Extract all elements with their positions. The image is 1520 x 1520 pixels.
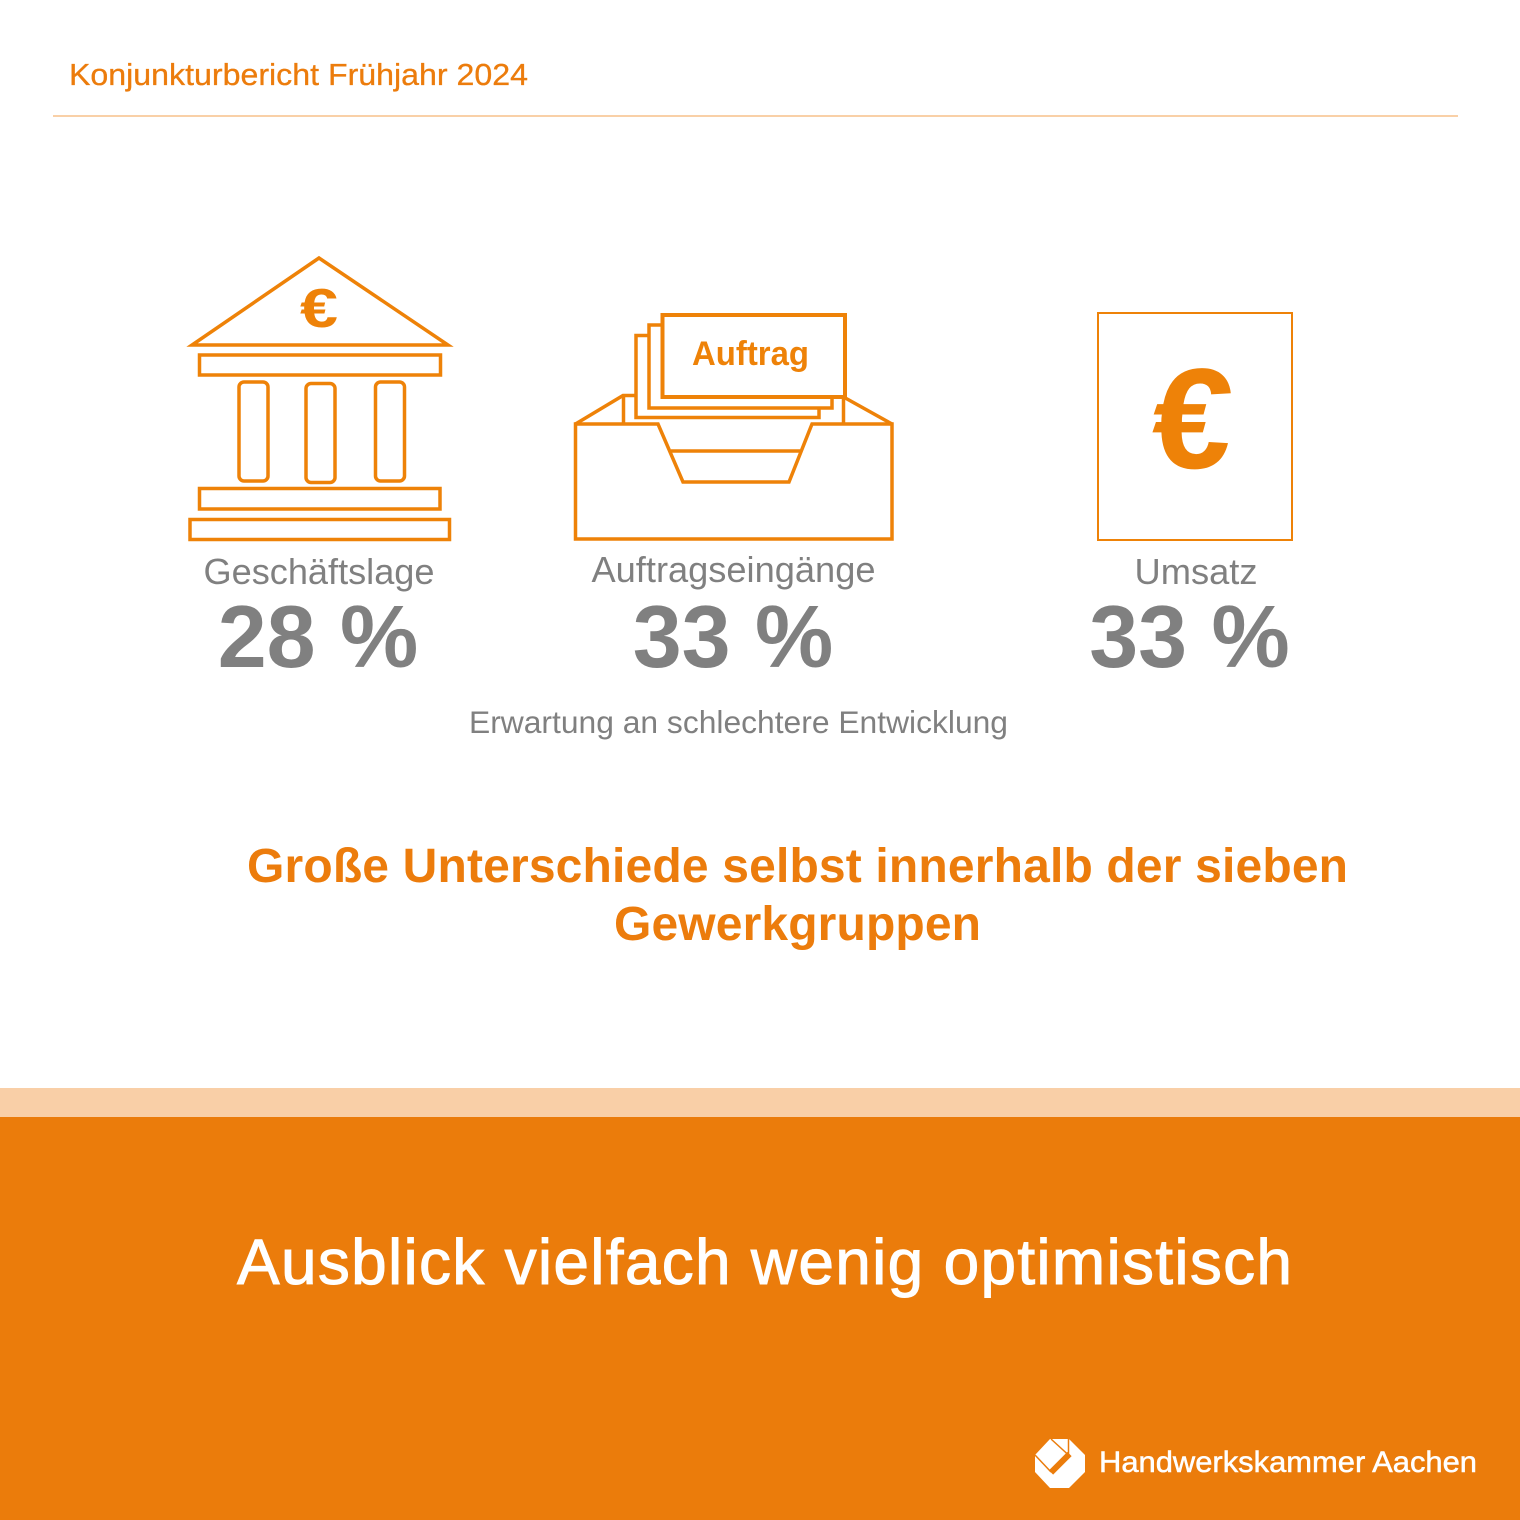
panel: footer (0, 1117, 1520, 1520)
light band (0, 1088, 1520, 1117)
icon text: Auftrag: Auftrag (692, 335, 809, 373)
heading: Große Unterschiede selbst innerhalb der sieben (247, 840, 1348, 893)
panel: Geschäftslage (190, 258, 450, 686)
label: Geschäftslage: Geschäftslage (204, 551, 434, 592)
icon: euro in bank gable: € (300, 277, 338, 339)
value: 33 %: 33 % (633, 587, 833, 686)
value: 33 %: 33 % (1089, 587, 1290, 686)
label: Auftragseingänge: Auftragseingänge (592, 549, 876, 590)
panel: Umsatz (1089, 313, 1292, 686)
icon: bank building (190, 258, 450, 540)
value: 28 %: 28 % (218, 587, 418, 686)
logo wordmark: Handwerkskammer Aachen (1099, 1446, 1477, 1479)
heading (247, 840, 1348, 951)
icon: logo octagon (1035, 1439, 1085, 1488)
icon: euro sign: € (1147, 339, 1238, 499)
heading: Gewerkgruppen (614, 898, 981, 951)
icon: order tray (576, 315, 892, 539)
logo (1035, 1439, 1477, 1488)
footer headline: Ausblick vielfach wenig optimistisch (237, 1226, 1292, 1298)
label: Umsatz: Umsatz (1134, 551, 1258, 592)
caption: Erwartung an schlechtere Entwicklung (469, 704, 1008, 740)
header title: Konjunkturbericht Frühjahr 2024 (69, 57, 528, 92)
panel: Auftragseingänge (576, 315, 892, 686)
icon: euro box (1098, 313, 1292, 540)
